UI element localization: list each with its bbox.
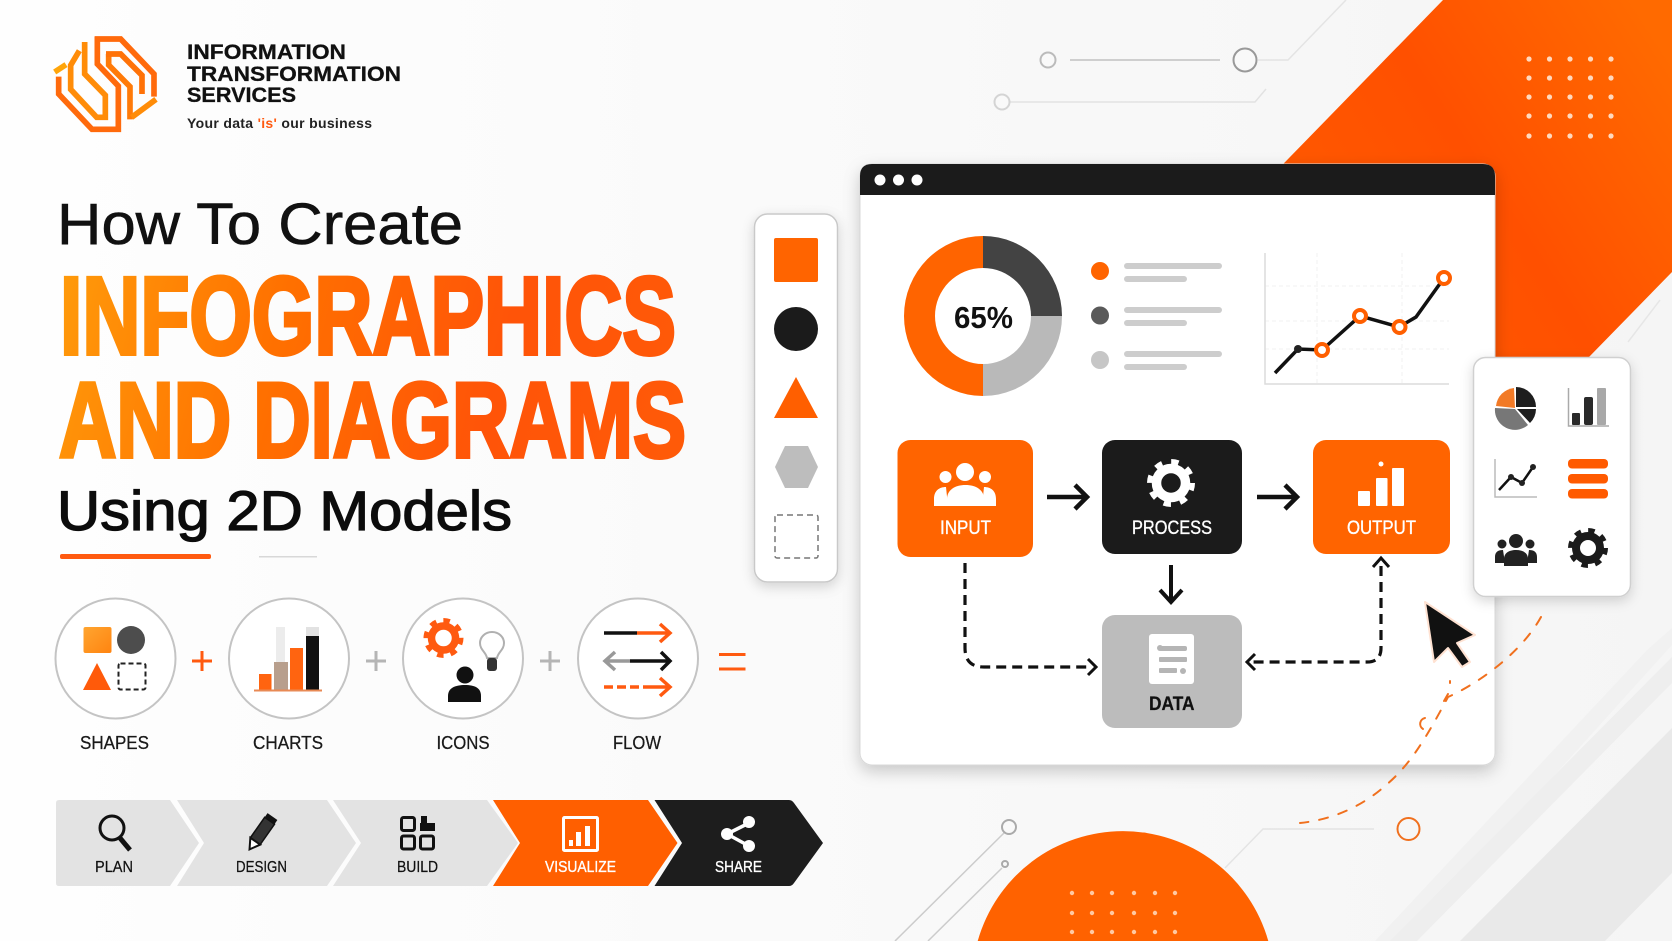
step: visualize: VISUALIZE — [545, 859, 616, 876]
step: design: DESIGN — [236, 859, 287, 876]
tagline: Your data 'is' our business — [187, 115, 372, 131]
component: icons: ICONS — [436, 733, 490, 753]
tool: square — [774, 238, 818, 282]
dashed arrow: input to data — [965, 563, 1092, 667]
arrow — [1047, 485, 1087, 509]
step: plan — [56, 800, 199, 886]
arrow: process to data — [1160, 565, 1182, 602]
flow box: process — [1102, 440, 1242, 554]
window frame — [860, 164, 1495, 765]
icon: line chart — [1495, 459, 1537, 497]
plus — [192, 651, 212, 671]
logo — [55, 37, 401, 131]
tool: circle — [774, 307, 818, 351]
icon: gear — [1570, 530, 1606, 566]
tool: triangle — [774, 377, 818, 418]
flow box: input: INPUT — [940, 518, 991, 539]
tool: dashed frame — [775, 515, 818, 558]
step: build — [333, 800, 518, 886]
arrow — [1257, 485, 1297, 509]
dashed arrow: output to data — [1252, 566, 1381, 662]
heading: how to create: How To Create — [57, 192, 463, 257]
legend — [1091, 262, 1222, 370]
arrowheads: output to data — [1247, 558, 1389, 670]
shape toolbar — [754, 214, 838, 582]
flow box: data: DATA — [1149, 694, 1195, 715]
icon: pie chart — [1495, 387, 1536, 430]
equals — [719, 654, 746, 669]
icon: stacked bars — [1568, 459, 1608, 498]
component: icons — [403, 598, 523, 753]
step: plan: PLAN — [95, 859, 133, 876]
flow box: output: OUTPUT — [1347, 518, 1416, 539]
orange dome with dots — [978, 831, 1268, 941]
step: share: SHARE — [715, 859, 762, 876]
component: flow: FLOW — [613, 733, 661, 753]
component: shapes: SHAPES — [80, 733, 149, 753]
flow box: data — [1102, 615, 1242, 728]
flow box: process: PROCESS — [1132, 518, 1212, 539]
logo mark — [55, 37, 156, 129]
step: build: BUILD — [397, 859, 438, 876]
component: shapes — [56, 598, 176, 753]
company name: SERVICES — [187, 84, 296, 107]
donut chart: 65% — [954, 300, 1013, 335]
icon: people — [1495, 534, 1537, 566]
company name — [187, 41, 401, 107]
icon panel — [1474, 358, 1630, 596]
step: design — [177, 800, 356, 886]
component: flow — [578, 598, 698, 753]
orange ring node — [1398, 818, 1420, 840]
tool: hexagon — [775, 446, 818, 488]
window title bar — [860, 164, 1495, 195]
line chart — [1265, 253, 1450, 384]
flow box: input — [898, 440, 1033, 557]
donut chart — [904, 236, 1062, 396]
heading: infographics: INFOGRAPHICS — [60, 255, 676, 378]
heading: using 2d models: Using 2D Models — [57, 479, 512, 542]
icon: bar chart — [1568, 388, 1609, 426]
company name: TRANSFORMATION — [187, 63, 401, 86]
step: share — [654, 800, 823, 886]
plus — [540, 651, 560, 671]
component: charts: CHARTS — [253, 733, 323, 753]
company name: INFORMATION — [187, 41, 346, 64]
component: charts — [229, 598, 349, 753]
underline — [60, 554, 317, 559]
browser window — [860, 164, 1495, 765]
title block — [57, 192, 686, 559]
orange diagonal shape with dots — [1100, 0, 1672, 610]
equation row — [56, 598, 746, 753]
step: visualize — [493, 800, 678, 886]
orange dashed path — [1300, 617, 1541, 823]
mouse cursor — [1425, 602, 1475, 667]
heading: and diagrams: AND DIAGRAMS — [59, 360, 686, 480]
plus — [366, 651, 386, 671]
arrowhead: input to data — [1088, 659, 1096, 675]
process chevrons — [56, 800, 823, 886]
flow box: output — [1313, 440, 1450, 554]
